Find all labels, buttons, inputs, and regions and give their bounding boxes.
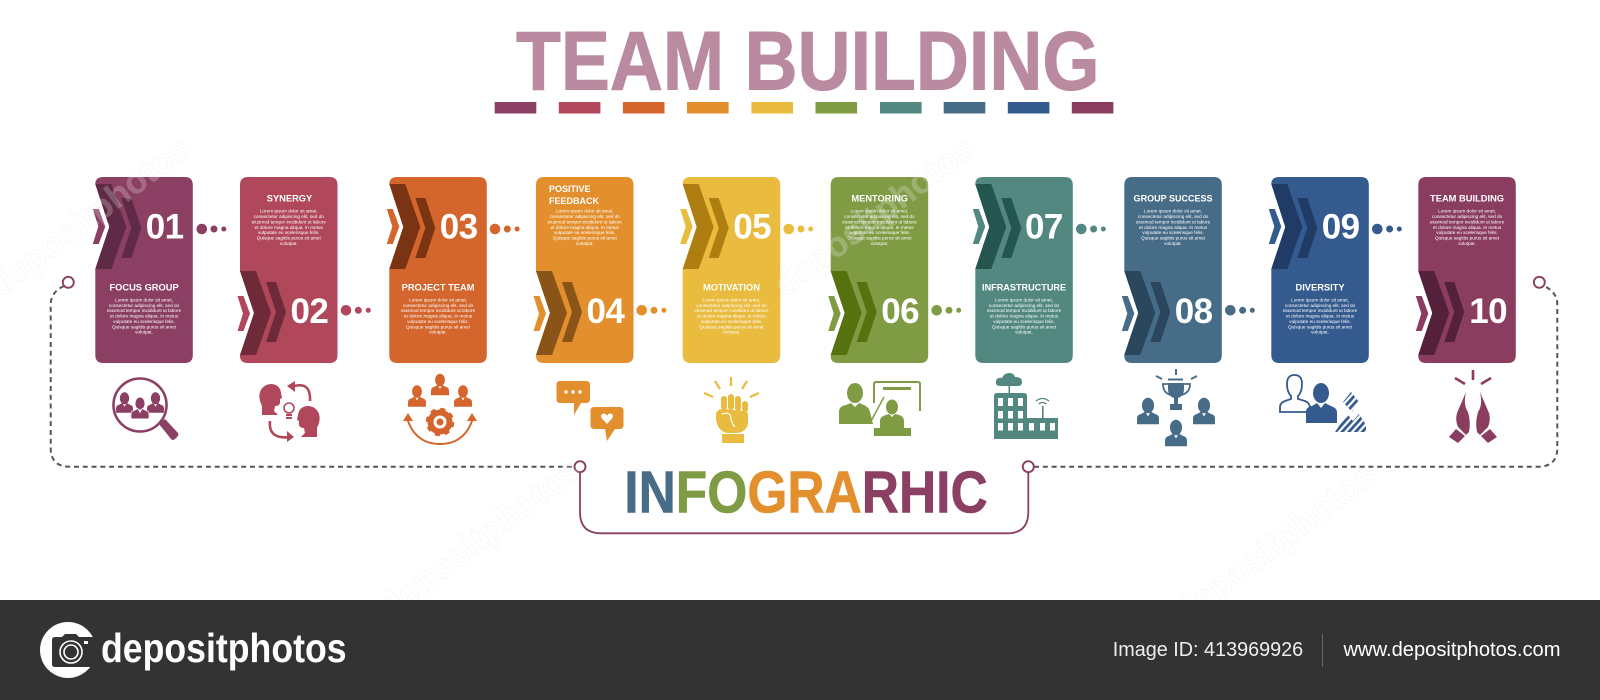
panel: 08 group success (1122, 177, 1255, 363)
icon: diversity people (1280, 375, 1366, 432)
panel: 09 diversity: DIVERSITY (1296, 282, 1345, 292)
icon: magnifier over group (114, 378, 178, 440)
panel: 03 project team: Quisque sagittis purus sit amet (406, 324, 471, 329)
panel: 05 motivation: et dolore magna aliqua. In metus (697, 314, 766, 319)
panel: 03 project team: 03 (440, 208, 478, 246)
panel: 01 focus group: eiusmod tempor incididunt ut labore (107, 308, 182, 313)
panel: 04 positive feedback: volutpat. (576, 241, 594, 246)
panel: 02 synergy: eiusmod tempor incididunt ut labore (252, 219, 326, 224)
panel: 08 group success: Lorem ipsum dolor sit amet, (1144, 209, 1202, 214)
icon: team around gear (403, 374, 477, 444)
panel: 03 project team: consectetur adipiscing elit, sed do (403, 303, 474, 308)
icon: chat bubbles (556, 381, 624, 441)
panel: 01 focus group: volutpat. (135, 330, 153, 335)
panel: 09 diversity: et dolore magna aliqua. In metus (1286, 314, 1355, 319)
panel: 10 team building (1416, 177, 1516, 363)
panel: 01 focus group: vulputate eu scelerisque felis. (113, 319, 175, 324)
panel: 03 project team: vulputate eu scelerisque felis. (407, 319, 469, 324)
logo: camera badge (40, 622, 96, 678)
panel: 06 mentoring: Quisque sagittis purus sit amet (847, 235, 912, 240)
panel: 08 group success: 08 (1175, 292, 1213, 331)
panel: 03 project team: PROJECT TEAM (402, 282, 475, 292)
panel: 01 focus group: consectetur adipiscing elit, sed do (109, 303, 180, 308)
panel: 02 synergy (238, 177, 371, 363)
panel: 02 synergy: consectetur adipiscing elit, sed do (254, 214, 324, 219)
icon: raised fist (704, 377, 759, 443)
panel: 01 focus group: Lorem ipsum dolor sit amet, (115, 298, 173, 302)
panel: 08 group success: eiusmod tempor incididunt ut labore (1136, 219, 1211, 224)
panel: 03 project team: et dolore magna aliqua. In metus (404, 314, 473, 319)
panel: 06 mentoring: eiusmod tempor incididunt ut labore (842, 219, 917, 224)
panel: 06 mentoring: MENTORING (851, 194, 908, 204)
panel: 08 group success: vulputate eu scelerisque felis. (1142, 230, 1204, 235)
panel: 09 diversity: Quisque sagittis purus sit amet (1288, 324, 1353, 329)
panel: 10 team building: 10 (1469, 292, 1507, 331)
panel: 05 motivation: MOTIVATION (703, 282, 760, 292)
panel: 05 motivation: Lorem ipsum dolor sit amet, (703, 298, 760, 302)
icon: trophy with team (1137, 369, 1215, 446)
panel: 05 motivation: volutpat. (723, 330, 740, 335)
panel: 02 synergy: Lorem ipsum dolor sit amet, (260, 209, 318, 214)
panel: 04 positive feedback: POSITIVE (549, 184, 591, 194)
panel: 04 positive feedback: 04 (586, 292, 625, 331)
panel: 10 team building: volutpat. (1458, 241, 1476, 246)
panel: 06 mentoring (828, 177, 961, 363)
panel: 08 group success: Quisque sagittis purus sit amet (1141, 235, 1206, 240)
panel: 05 motivation: Quisque sagittis purus sit amet (699, 324, 764, 329)
panel: 09 diversity: 09 (1322, 208, 1360, 246)
panel: 10 team building: eiusmod tempor incididunt ut labore (1430, 219, 1505, 224)
panel: 05 motivation: vulputate eu scelerisque felis. (701, 319, 762, 324)
panel: 05 motivation: consectetur adipiscing elit, sed do (696, 303, 767, 308)
panel: 09 diversity: vulputate eu scelerisque felis. (1289, 319, 1351, 324)
infographic heading: INFOGRARHIC (624, 459, 988, 525)
panel: 10 team building: et dolore magna aliqua. In metus (1433, 225, 1502, 230)
panel: 06 mentoring: 06 (881, 292, 919, 331)
panel: 09 diversity (1269, 177, 1402, 363)
title: TEAM BUILDING (516, 14, 1100, 108)
panel: 01 focus group: 01 (146, 208, 184, 246)
panel: 07 infrastructure (973, 177, 1106, 363)
panel: 07 infrastructure: INFRASTRUCTURE (982, 282, 1066, 292)
watermarks (0, 128, 1383, 631)
dashed connector: right (1034, 286, 1557, 467)
panel: 03 project team (387, 177, 520, 363)
panel: 07 infrastructure: vulputate eu scelerisque felis. (993, 319, 1055, 324)
panel: 05 motivation: eiusmod tempor incididunt ut labore (694, 308, 769, 313)
panel: 01 focus group: FOCUS GROUP (109, 282, 179, 292)
watermarks: depositphotos (371, 450, 587, 626)
panel: 04 positive feedback (534, 177, 666, 363)
panel: 10 team building: Quisque sagittis purus sit amet (1435, 235, 1500, 240)
panel: 10 team building: consectetur adipiscing elit, sed do (1432, 214, 1503, 219)
panel: 02 synergy: volutpat. (280, 241, 298, 246)
panel: 07 infrastructure: Quisque sagittis purus sit amet (992, 324, 1057, 329)
panel: 05 motivation: 05 (733, 208, 771, 246)
panel: 07 infrastructure: Lorem ipsum dolor sit amet, (995, 298, 1053, 302)
icon: praying hands (1449, 370, 1497, 443)
panel: 07 infrastructure: et dolore magna aliqua. In metus (990, 314, 1059, 319)
icon: two heads with bulb and cycle arrows (259, 381, 320, 442)
panel: 04 positive feedback: et dolore magna aliqua. In metus (551, 225, 620, 230)
image id: Image ID: 413969926 (1113, 639, 1303, 661)
title colour bars (495, 102, 1113, 114)
connector nodes (63, 277, 1545, 472)
panel: 09 diversity: volutpat. (1311, 330, 1329, 335)
watermarks: depositphotos (1167, 455, 1383, 631)
panel: 08 group success: volutpat. (1164, 241, 1182, 246)
panel: 02 synergy: Quisque sagittis purus sit amet (257, 235, 321, 240)
dashed connector: left (51, 286, 574, 467)
panel: 04 positive feedback: vulputate eu scelerisque felis. (554, 230, 616, 235)
panel: 04 positive feedback: consectetur adipiscing elit, sed do (550, 214, 620, 219)
panel: 07 infrastructure: eiusmod tempor incididunt ut labore (987, 308, 1062, 313)
panel: 06 mentoring: Lorem ipsum dolor sit amet, (851, 209, 908, 214)
panel: 09 diversity: consectetur adipiscing elit, sed do (1285, 303, 1356, 308)
panel: 03 project team: Lorem ipsum dolor sit amet, (409, 298, 467, 302)
panel: 08 group success: GROUP SUCCESS (1134, 194, 1213, 204)
panel: 08 group success: consectetur adipiscing elit, sed do (1138, 214, 1209, 219)
panel: 06 mentoring: consectetur adipiscing elit, sed do (844, 214, 915, 219)
panel: 09 diversity: eiusmod tempor incididunt ut labore (1283, 308, 1358, 313)
panel: 02 synergy: vulputate eu scelerisque felis. (258, 230, 320, 235)
panel: 10 team building: TEAM BUILDING (1430, 194, 1504, 204)
logo wordmark: depositphotos (101, 626, 347, 672)
panel: 02 synergy: 02 (290, 292, 328, 331)
panel: 07 infrastructure: 07 (1025, 208, 1063, 246)
panel: 04 positive feedback: Quisque sagittis purus sit amet (553, 235, 617, 240)
panel: 10 team building: vulputate eu scelerisque felis. (1436, 230, 1498, 235)
footer band (0, 600, 1600, 700)
panel: 02 synergy: SYNERGY (267, 194, 313, 204)
panel: 05 motivation (680, 177, 813, 363)
website: www.depositphotos.com (1342, 639, 1560, 661)
panel: 06 mentoring: et dolore magna aliqua. In metus (845, 225, 914, 230)
panel: 01 focus group: Quisque sagittis purus sit amet (112, 324, 177, 329)
panel: 04 positive feedback: eiusmod tempor incididunt ut labore (548, 219, 622, 224)
panel: 07 infrastructure: consectetur adipiscing elit, sed do (989, 303, 1060, 308)
panel: 01 focus group: et dolore magna aliqua. In metus (110, 314, 179, 319)
panel: 08 group success: et dolore magna aliqua. In metus (1139, 225, 1208, 230)
icon: mentor at board (839, 382, 920, 436)
panel: 09 diversity: Lorem ipsum dolor sit amet, (1291, 298, 1349, 302)
panel: 04 positive feedback: FEEDBACK (549, 196, 600, 206)
panel: 01 focus group (93, 177, 226, 363)
panel: 06 mentoring: volutpat. (871, 241, 888, 246)
panel: 06 mentoring: vulputate eu scelerisque felis. (849, 230, 910, 235)
icon: cloud connected building (994, 373, 1058, 439)
panel: 07 infrastructure: volutpat. (1015, 330, 1033, 335)
panel: 03 project team: volutpat. (429, 330, 447, 335)
watermarks: depositphotos (766, 128, 982, 304)
panel: 04 positive feedback: Lorem ipsum dolor sit amet, (556, 209, 614, 214)
panel: 03 project team: eiusmod tempor incididunt ut labore (401, 308, 476, 313)
panel: 02 synergy: et dolore magna aliqua. In metus (255, 225, 324, 230)
panel: 10 team building: Lorem ipsum dolor sit amet, (1438, 209, 1496, 214)
bracket around infographic label (580, 472, 1028, 533)
